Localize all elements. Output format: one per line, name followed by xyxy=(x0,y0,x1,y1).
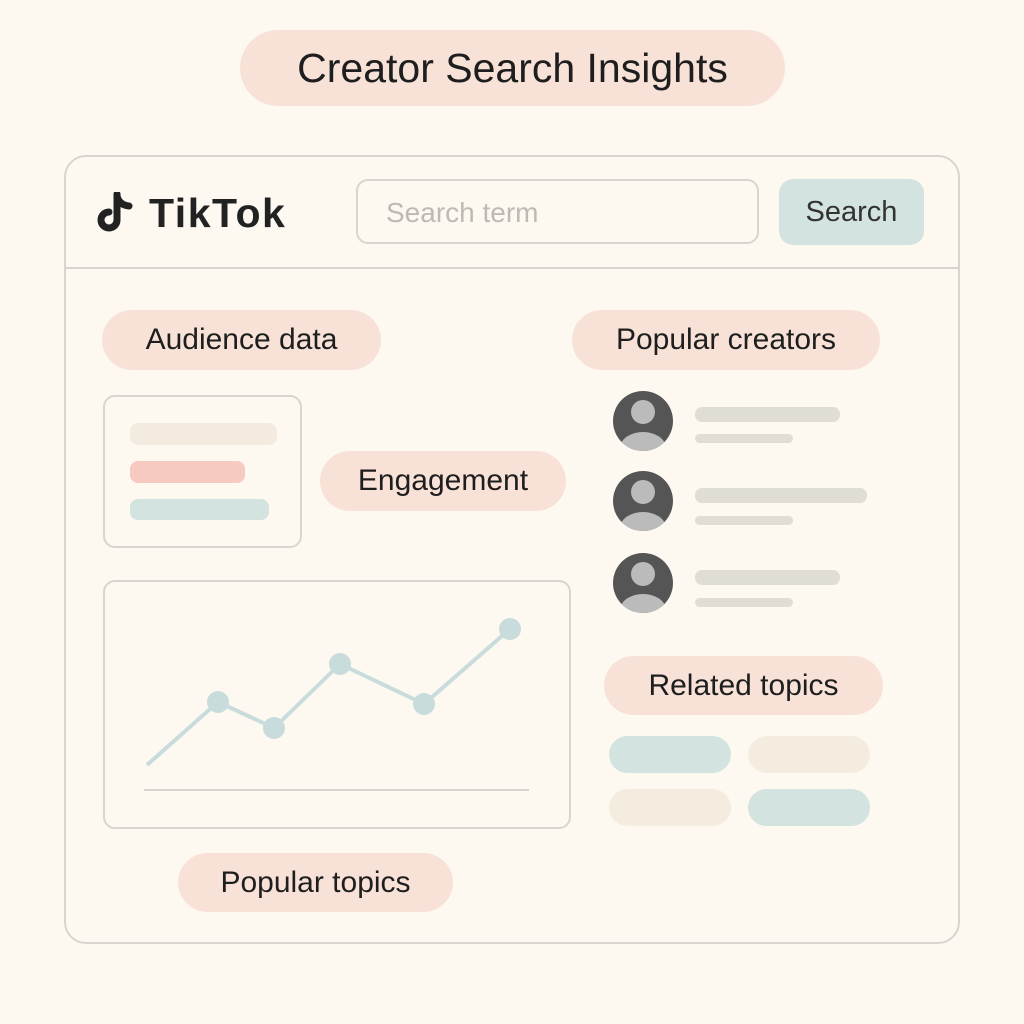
audience bars card xyxy=(103,395,302,548)
search input: Search term xyxy=(386,197,538,228)
heading: related topics xyxy=(604,656,883,715)
creators list xyxy=(613,391,867,613)
search button xyxy=(779,179,924,245)
heading: audience data: Audience data xyxy=(146,323,337,356)
heading: related topics: Related topics xyxy=(648,668,839,702)
line chart xyxy=(103,580,571,829)
logo: TikTok: TikTok xyxy=(149,190,286,236)
heading: popular topics: Popular topics xyxy=(220,866,411,898)
search button: Search xyxy=(806,196,897,228)
topic chips xyxy=(609,736,870,826)
heading: audience data xyxy=(102,310,381,370)
heading: engagement xyxy=(320,451,566,511)
search input xyxy=(356,179,759,244)
heading: popular creators: Popular creators xyxy=(616,323,836,356)
heading: popular topics xyxy=(178,853,453,912)
title xyxy=(240,30,785,106)
heading: engagement: Engagement xyxy=(358,464,528,497)
heading: popular creators xyxy=(572,310,880,370)
title: Creator Search Insights xyxy=(297,44,728,90)
panel: main dashboard xyxy=(64,155,960,944)
